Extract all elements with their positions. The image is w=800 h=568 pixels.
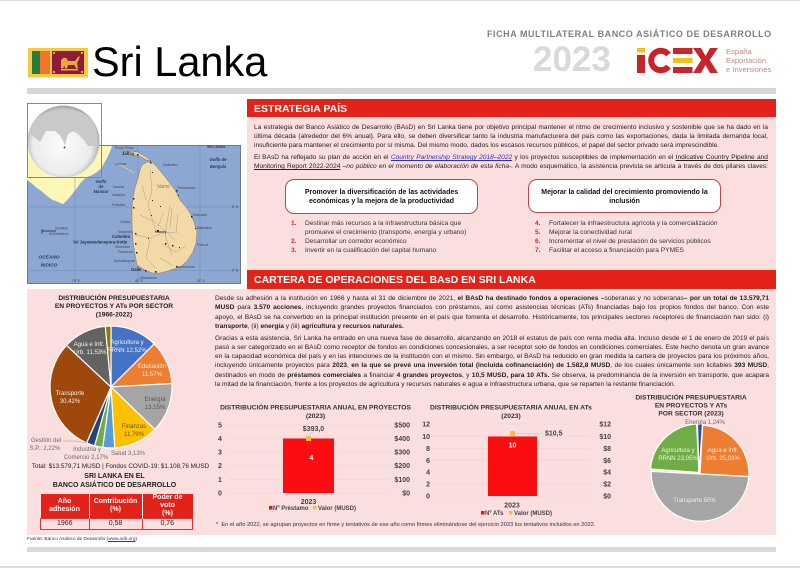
pie chart: distribución 1966-2022: Agricultura y: [110, 340, 144, 346]
table: participación: adhesión: [49, 506, 80, 513]
header: fiche name: FICHA MULTILATERAL BANCO ASIÁTICO DE DESARROLLO: [487, 29, 772, 39]
pie chart: distribución 1966-2022: 11,57%: [142, 372, 163, 378]
text block: estrategia: Monitoring Report 2022-2024 –no público en el momento de elaboración de esta ficha-. A modo esquemático, la asistencia prevista se articula a través de dos pilares claves:: [254, 163, 768, 170]
map: Sri Lanka with locator globe: Kandy: [155, 230, 167, 234]
year: 2023: [533, 40, 611, 79]
text block: cartera: destinados en modo de préstamos comerciales a financiar 4 grandes proyectos, y 10,5 MUSD, para 10 ATs. Se observa, la predominancia de la inversión en transporte, que acapara: [215, 372, 769, 379]
bar chart: ATs 2023: 4: [426, 470, 430, 476]
divider bar: [27, 88, 776, 94]
bar chart: proyectos 2023: 5: [218, 422, 222, 430]
text block: cartera: [215, 295, 769, 388]
bar chart: proyectos 2023: DISTRIBUCIÓN PRESUPUESTARIA ANUAL EN PROYECTOS: [220, 402, 411, 412]
text block: estrategia: insuficiente para mantener el crecimiento por sí misma. Del mismo modo, dados los escasos recursos públicos, el papel del sector privado será imprescindible.: [254, 142, 719, 149]
table: participación: 1966: [57, 520, 73, 527]
text block: estrategia: El BAsD ha reflejado su plan de acción en el Country Partnership Strategy 2018–2022 y los proyectos susceptibles de implementación en el Indicative Country Pipeline and: [254, 154, 768, 161]
text block: cartera: pasó a ser categorizado en el BAsD como receptor de fondos en condiciones concesionales, a ser receptor solo de fondos en condiciones comerciales. Este hecho denota un gran avance: [215, 344, 769, 351]
bar chart: ATs 2023: $10: [599, 434, 611, 441]
list: pilar 1: Destinar más recursos a la infraestructura básica que: [305, 220, 461, 227]
map: Sri Lanka with locator globe: 6° N: [232, 268, 239, 272]
heading: estrategia país: ESTRATEGIA PAÍS: [254, 103, 347, 115]
map: Sri Lanka with locator globe: SRI LANKA: [207, 145, 226, 149]
map: Sri Lanka with locator globe: Colombo: [112, 234, 131, 239]
top hairline: [0, 0, 800, 1]
map: Sri Lanka with locator globe: Galle: [131, 267, 142, 272]
map: Sri Lanka with locator globe: Hambantota: [176, 265, 195, 269]
map: Sri Lanka with locator globe: Punto Pedro: [115, 146, 134, 150]
bar chart: proyectos 2023: $400: [394, 436, 410, 443]
callout: pilar 1: [285, 179, 478, 214]
bar chart: proyectos 2023: $300: [394, 450, 410, 456]
heading: Sri Lanka en el BAsD: [53, 473, 176, 488]
map: Sri Lanka with locator globe: Mannar: [94, 189, 109, 194]
bar chart: ATs 2023: 2: [426, 482, 430, 488]
bar chart: ATs 2023: [422, 402, 611, 517]
heading: Sri Lanka en el BAsD: SRI LANKA EN EL: [84, 473, 145, 480]
text block: cartera: transporte, (ii) energía y (iii) agricultura y recursos naturales.: [215, 323, 404, 330]
text block: cartera: la mitad de la financiación, frente a los proyectos de agricultura y recursos naturales e agua e infraestructura urbana, que se reparten la restante financiación.: [215, 381, 675, 388]
pie chart: distribución 1966-2022: Industria y: [73, 447, 101, 453]
bar chart: proyectos 2023: $200: [394, 463, 410, 470]
table: participación: Poder de: [153, 494, 182, 501]
pie chart: distribución 1966-2022: 13,15%: [145, 405, 166, 411]
map: Sri Lanka with locator globe: Pottuvil: [197, 243, 208, 247]
map: Sri Lanka with locator globe: Mullaittivu: [163, 163, 178, 167]
bar chart: ATs 2023: 2023: [504, 502, 520, 510]
list: pilar 2: 7.: [535, 247, 540, 254]
pie chart: distribución 1966-2022: Comercio 2,17%: [64, 455, 109, 461]
text block: cartera: Gracias a esta asistencia, Sri Lanka ha entrado en una nueva fase de desarrollo, alcanzando en 2018 el estatus de país con renta media alta. Incluso desde el 1 de enero de 2019 el país: [215, 334, 769, 342]
panel: estrategia país: [247, 117, 776, 270]
map: Sri Lanka with locator globe: Moratuwa: [115, 245, 130, 249]
bottom hairline: [0, 566, 800, 568]
text block: cartera: incluyendo únicamente proyectos para 2023, en la que se prevé una inversión total (incluida cofinanciación) de 1.582,8 MUSD, de los cuales únicamente son licitables 393 MUSD,: [215, 362, 769, 369]
list: pilar 2: 5.: [535, 229, 540, 236]
text block: cartera: Desde su adhesión a la institución en 1966 y hasta el 31 de diciembre de 2021, el BAsD ha destinado fondos a operaciones –soberanas y no soberanas– por un total de 13.579,71: [215, 295, 769, 302]
logo: ICEX: Exportación: [726, 56, 766, 65]
bar chart: proyectos 2023: 0: [218, 490, 222, 498]
map: Sri Lanka with locator globe: Batticaloa: [197, 226, 212, 230]
text block: estrategia: [254, 124, 768, 170]
footnote: * En el año 2022, se agrupan proyectos en firme y tentativos de ese año como firmes eliminándose del ejercicio 2023 los tentativos incluidos en 2022.: [216, 522, 595, 528]
map: Sri Lanka with locator globe: Mannar: [115, 162, 127, 166]
pie chart: distribución 1966-2022: Total: $13.579,71 MUSD | Fondos COVID-19: $1.108,76 MUSD: [32, 463, 210, 470]
footer bar: [27, 547, 776, 552]
table: participación: (%): [110, 506, 121, 513]
bar chart: proyectos 2023: 3: [218, 450, 222, 456]
map: Sri Lanka with locator globe: 81° E: [197, 279, 205, 283]
bar chart: ATs 2023: 6: [426, 458, 430, 465]
callout: pilar 2: Mejorar la calidad del crecimiento promoviendo la: [541, 189, 708, 196]
bar chart: ATs 2023: 10: [422, 434, 430, 441]
panel background: [247, 117, 776, 270]
map: Sri Lanka with locator globe: Bengala: [210, 164, 227, 169]
heading: cartera de operaciones: [247, 270, 776, 289]
pie chart: distribución 1966-2022: DISTRIBUCIÓN PRESUPUESTARIA: [58, 293, 170, 302]
map: Sri Lanka with locator globe: Chilaw: [120, 220, 131, 224]
bar chart: ATs 2023: 0: [426, 494, 430, 500]
table: participación: Año: [58, 498, 71, 505]
map: Sri Lanka with locator globe: Trincomalee: [177, 186, 196, 190]
map: Sri Lanka with locator globe: Kalkudah: [193, 213, 207, 217]
map: Sri Lanka with locator globe: ÍNDICO: [41, 262, 58, 268]
bar chart: ATs 2023: $0: [603, 494, 611, 500]
list: pilar 2: Facilitar el acceso a financiación para PYMES: [549, 247, 684, 254]
bar chart: ATs 2023: $8: [603, 446, 611, 453]
callout: pilar 1: Promover la diversificación de las actividades: [305, 189, 458, 196]
bar chart: ATs 2023: Nº ATs: [485, 511, 504, 517]
table: participación: Contribución: [94, 498, 137, 505]
text block: cartera: apoyo, el BAsD se ha convertido en la principal institución presente en el país que fomenta el desarrollo. Históricamente, los principales sectores receptores de financiación han sido: (i): [215, 314, 769, 321]
map: Sri Lanka with locator globe: 80° E: [135, 279, 143, 283]
bar chart: proyectos 2023: 2: [218, 463, 222, 470]
pie chart: distribución 1966-2022: Transporte: [56, 391, 85, 397]
map: Sri Lanka with locator globe: Golfo de: [210, 157, 227, 162]
bar chart: proyectos 2023: $500: [394, 422, 410, 430]
list: pilar 2: [535, 220, 718, 254]
list: pilar 1: promueve el crecimiento (transporte, energía y urbano): [305, 229, 466, 236]
title: Sri Lanka: [92, 38, 267, 85]
bar chart: proyectos 2023: Nº Préstamo: [273, 506, 309, 512]
map: Sri Lanka with locator globe: Negombo: [118, 230, 133, 234]
map: Sri Lanka with locator globe: 50 Millas: [55, 226, 68, 230]
pie chart: distribución 1966-2022: RRNN 12,52%: [107, 348, 147, 354]
bar chart: proyectos 2023: $393,0: [303, 426, 324, 433]
map: Sri Lanka with locator globe: 79° E: [72, 279, 80, 283]
list: pilar 1: Desarrollar un corredor económico: [305, 238, 407, 245]
map: Sri Lanka with locator globe: de: [99, 184, 104, 189]
map: Sri Lanka with locator globe: 80 Kilómetros: [49, 232, 69, 236]
map: Sri Lanka with locator globe: Sri Jayawardenepura-Kotte: [73, 240, 128, 244]
callout: pilar 2: [528, 179, 721, 213]
pie chart: distribución 1966-2022: (1966-2022): [96, 312, 132, 318]
bar chart: proyectos 2023: [218, 402, 411, 512]
map: Sri Lanka with locator globe: Hikkaduwa: [140, 276, 157, 280]
map: Sri Lanka with locator globe: Puttalam: [112, 203, 126, 207]
pie chart: sector 2023: Agua e Infr.: [708, 448, 739, 454]
map: Sri Lanka with locator globe: Ambalangoda: [114, 259, 135, 263]
table: participación: 0,76: [160, 520, 174, 527]
pie chart: sector 2023: POR SECTOR (2023): [658, 410, 724, 418]
bar chart: proyectos 2023: 1: [218, 477, 222, 484]
pie chart: distribución 1966-2022: Agua e Infr.: [74, 342, 105, 348]
pie chart: sector 2023: DISTRIBUCIÓN PRESUPUESTARIA: [635, 392, 747, 402]
map: Sri Lanka with locator globe: Vanni: [157, 184, 170, 190]
table: participación: voto: [160, 502, 175, 509]
bar chart: ATs 2023: 8: [426, 446, 430, 453]
heading: estrategia país: [247, 99, 776, 117]
table: participación: [40, 494, 193, 530]
pie chart: sector 2023: RRNN 23,05%: [658, 456, 698, 462]
bar chart: ATs 2023: $10,5: [545, 430, 563, 438]
bar chart: proyectos 2023: 4: [218, 436, 222, 443]
heading: cartera de operaciones: CARTERA DE OPERACIONES DEL BAsD EN SRI LANKA: [254, 274, 536, 286]
bar chart: ATs 2023: (2023): [501, 413, 521, 420]
pie chart: sector 2023: Urb. 25,03%: [706, 456, 740, 462]
bar chart: proyectos 2023: Valor (MUSD): [318, 506, 356, 512]
pie chart: distribución 1966-2022: 30,42%: [60, 399, 81, 405]
bar chart: proyectos 2023: 4: [310, 455, 314, 462]
callout: pilar 2: inclusión: [609, 198, 640, 204]
text block: cartera: MUSD para 3.570 acciones, incluyendo grandes proyectos financiados con préstamos, así como asistencias técnicas (ATs) financiadas bajo los propios fondos del banco. Con este: [215, 304, 769, 311]
bar chart: ATs 2023: $12: [599, 422, 611, 428]
pie chart: sector 2023: Agricultura y: [661, 448, 695, 454]
list: pilar 1: Invertir en la cualificación del capital humano: [305, 247, 436, 254]
pie chart: distribución 1966-2022: Energía: [144, 397, 166, 403]
list: pilar 2: Fortalecer la infraestructura agrícola y la comercialización: [549, 220, 718, 227]
map: Sri Lanka with locator globe: Panadura: [118, 250, 133, 254]
bar chart: proyectos 2023: 2023: [301, 499, 316, 506]
text block: estrategia: última década (alrededor del 6% anual). Para ello, se deben diversificar tanto la industria manufacturera del país como las exportaciones, dada la limitada demanda local,: [254, 133, 768, 140]
source: Fuente: Banco Asiático de Desarrollo (www.adb.org): [27, 537, 137, 542]
pie chart: distribución 1966-2022: [30, 293, 210, 470]
text block: cartera: en la capacidad económica del país y en las intenciones de la institución con el mismo. Sin embargo, el BAsD ha reducido en gran medida la cartera de proyectos para los próximos años,: [215, 353, 769, 360]
heading: Sri Lanka en el BAsD: BANCO ASIÁTICO DE DESARROLLO: [53, 482, 176, 488]
map: Sri Lanka with locator globe: 8° N: [232, 205, 239, 209]
map: Sri Lanka with locator globe: Golfo: [96, 179, 107, 184]
list: pilar 1: 1.: [291, 220, 296, 227]
map: Sri Lanka with locator globe: [27, 103, 241, 284]
bar chart: ATs 2023: $2: [603, 482, 611, 488]
icon: Sri Lanka flag: [28, 48, 88, 78]
text block: estrategia: La estrategia del Banco Asiático de Desarrollo (BAsD) en Sri Lanka tiene por objetivo principal mantener el ritmo de crecimiento inclusivo y sostenible que se ha dado en la: [254, 124, 768, 131]
panel: cartera de operaciones: [27, 289, 776, 535]
pie chart: sector 2023: EN PROYECTOS Y ATs: [655, 402, 727, 410]
pie chart: distribución 1966-2022: S.P.: 2,22%: [30, 446, 61, 452]
pie chart: distribución 1966-2022: EN PROYECTOS Y ATs POR SECTOR: [55, 303, 173, 310]
bar chart: ATs 2023: Valor (MUSD): [514, 511, 552, 517]
pie chart: sector 2023: Energía 1,24%: [685, 420, 726, 426]
bar chart: ATs 2023: 12: [422, 422, 430, 428]
bar chart: ATs 2023: DISTRIBUCIÓN PRESUPUESTARIA ANUAL EN ATs: [430, 402, 592, 412]
pie chart: distribución 1966-2022: 11,79%: [124, 432, 145, 438]
list: pilar 2: 4.: [535, 220, 540, 227]
pie chart: distribución 1966-2022: Finanzas: [122, 424, 146, 430]
pie chart: distribución 1966-2022: Educación: [138, 364, 166, 370]
bar chart: ATs 2023: $4: [603, 470, 611, 476]
bar chart: proyectos 2023: $0: [402, 490, 410, 498]
callout: pilar 1: económicas y la mejora de la productividad: [309, 198, 454, 204]
map: Sri Lanka with locator globe: Jaffna: [122, 151, 135, 156]
list: pilar 2: 6.: [535, 238, 540, 245]
map: Sri Lanka with locator globe: Mannar: [113, 185, 125, 189]
pie chart: distribución 1966-2022: Gestión del: [31, 438, 61, 444]
bar chart: ATs 2023: $6: [603, 458, 611, 465]
map: Sri Lanka with locator globe: OCÉANO: [38, 252, 60, 260]
logo: ICEX: e Inversiones: [726, 65, 771, 74]
logo: ICEX: España: [726, 47, 752, 56]
list: pilar 1: 2.: [291, 238, 296, 245]
bar chart: proyectos 2023: (2023): [306, 413, 325, 420]
map: Sri Lanka with locator globe: Kalpitiya: [112, 193, 125, 197]
bar chart: proyectos 2023: $100: [394, 477, 410, 484]
table: participación: 0,58: [109, 520, 122, 527]
list: pilar 2: Mejorar la conectividad rural: [549, 229, 632, 236]
pie chart: distribución 1966-2022: Urb. 11,53%: [74, 350, 107, 356]
list: pilar 1: 3.: [291, 247, 296, 254]
pie chart: sector 2023: Transporte 50%: [673, 498, 716, 504]
table: participación: (%): [162, 510, 173, 517]
list: pilar 2: Incrementar el nivel de prestación de servicios públicos: [549, 238, 711, 245]
pie chart: distribución 1966-2022: Salud 3,13%: [111, 451, 146, 457]
bar chart: ATs 2023: 10: [509, 442, 516, 450]
list: pilar 1: [291, 220, 466, 254]
logo: ICEX: [637, 47, 771, 74]
